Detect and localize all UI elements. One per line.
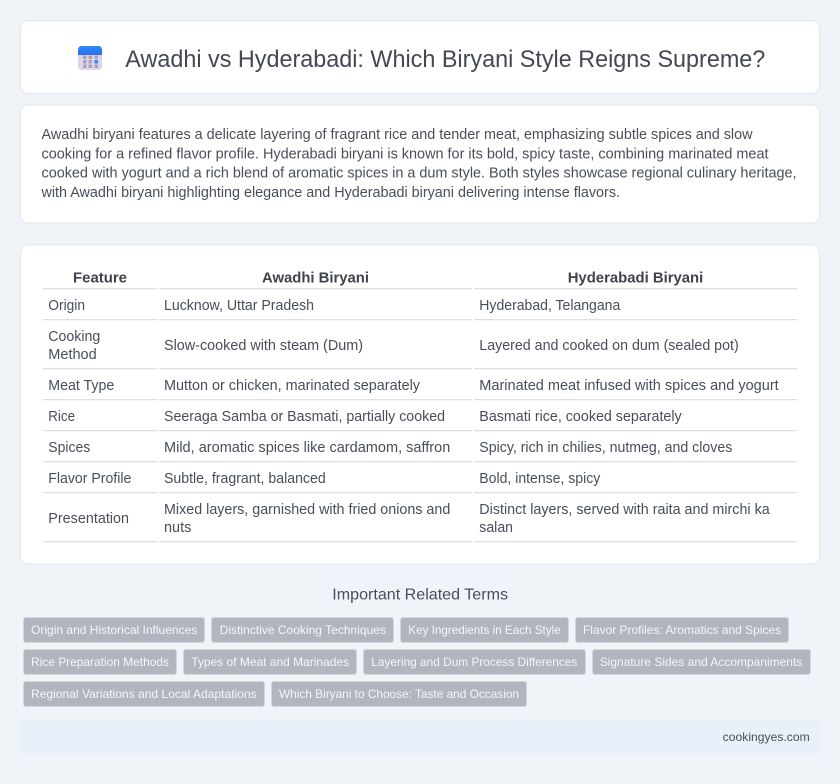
table row: meat type [43, 378, 797, 400]
table row: rice [43, 409, 797, 431]
tag: flavor profiles: Flavor Profiles: Aromatics and Spices [583, 623, 781, 637]
text block: description paragraph: cooked with yogurt and a rich blend of aromatic spices in a dum style. Both styles showcase regional culinary heritage, [42, 166, 797, 182]
table row: cooking method: Method [48, 347, 97, 363]
table row: rice: Basmati rice, cooked separately [479, 409, 682, 425]
tag: rice preparation methods [24, 650, 176, 674]
table row: cooking method [43, 329, 797, 369]
table row: cooking method: Layered and cooked on dum (sealed pot) [479, 338, 739, 354]
tag: origin and historical influences: Origin and Historical Influences [31, 623, 197, 637]
tag: distinctive cooking techniques: Distinctive Cooking Techniques [220, 623, 386, 637]
tag: layering and dum process differences: Layering and Dum Process Differences [371, 655, 577, 669]
table header row: Hyderabadi Biryani [568, 269, 703, 286]
text block: description paragraph [41, 127, 797, 201]
heading: important related terms: Important Related Terms [332, 586, 508, 603]
table row: meat type: Marinated meat infused with spices and yogurt [479, 378, 779, 394]
tag: key ingredients: Key Ingredients in Each Style [408, 623, 561, 637]
footer source text: cookingyes.com [723, 730, 810, 744]
table header row: Feature [73, 269, 127, 286]
tag: signature sides and accompaniments: Signature Sides and Accompaniments [600, 655, 802, 669]
table row: rice: Rice [48, 409, 75, 425]
table row: flavor profile [43, 471, 797, 493]
tag: layering and dum process differences [364, 650, 586, 674]
table header row: Awadhi Biryani [262, 269, 369, 286]
table row: presentation: Presentation [48, 511, 129, 527]
footer bar [20, 720, 820, 754]
tag: key ingredients [400, 618, 568, 642]
icon: calendar [78, 46, 102, 70]
tag: types of meat and marinades [184, 650, 356, 674]
table row: origin: Lucknow, Uttar Pradesh [164, 298, 314, 314]
table row: spices: Spicy, rich in chilies, nutmeg, and cloves [479, 440, 732, 456]
table row: presentation: salan [479, 520, 513, 536]
panel: comparison table [20, 245, 820, 564]
table row: spices: Mild, aromatic spices like cardamom, saffron [164, 440, 450, 456]
table row: cooking method: Slow-cooked with steam (Dum) [164, 338, 363, 354]
table row: origin: Origin [48, 298, 85, 314]
title: Awadhi vs Hyderabadi: Which Biryani Style Reigns Supreme? [125, 46, 765, 73]
table row: presentation: Mixed layers, garnished with fried onions and [164, 502, 450, 518]
tag: regional variations [24, 682, 264, 706]
tag: signature sides and accompaniments [592, 650, 810, 674]
tag: which biryani to choose: Which Biryani to Choose: Taste and Occasion [279, 687, 519, 701]
tag: types of meat and marinades: Types of Meat and Marinades [191, 655, 349, 669]
table row: origin: Hyderabad, Telangana [479, 298, 620, 314]
tag: origin and historical influences [24, 618, 204, 642]
table row: presentation [43, 502, 797, 542]
related term tags [24, 618, 810, 706]
table row: flavor profile: Flavor Profile [48, 471, 131, 487]
text block: description paragraph: with Awadhi biryani highlighting elegance and Hyderabadi biryani delivering intense flavors. [41, 185, 620, 201]
text block: description paragraph: Awadhi biryani features a delicate layering of fragrant rice and tender meat, emphasizing subtle spices and slow [42, 127, 753, 143]
tag: rice preparation methods: Rice Preparation Methods [31, 655, 169, 669]
table row: meat type: Meat Type [48, 378, 114, 394]
table row: spices: Spices [48, 440, 90, 456]
tag: distinctive cooking techniques [212, 618, 394, 642]
table row: cooking method: Cooking [48, 329, 100, 345]
tag: regional variations: Regional Variations and Local Adaptations [31, 687, 257, 701]
panel: description [20, 105, 820, 223]
table row: rice: Seeraga Samba or Basmati, partially cooked [164, 409, 445, 425]
tag: flavor profiles [576, 618, 788, 642]
table row: origin [43, 298, 797, 320]
table row: spices [43, 440, 797, 462]
table header row [43, 269, 797, 289]
text block: description paragraph: cooking for a refined flavor profile. Hyderabadi biryani is known for its bold, spicy taste, combining marinated meat [42, 146, 768, 162]
table row: flavor profile: Subtle, fragrant, balanced [164, 471, 326, 487]
tag: which biryani to choose [272, 682, 526, 706]
table row: flavor profile: Bold, intense, spicy [479, 471, 601, 487]
panel: title header [20, 20, 820, 94]
table row: presentation: nuts [164, 520, 191, 536]
table row: meat type: Mutton or chicken, marinated separately [164, 378, 421, 394]
table row: presentation: Distinct layers, served with raita and mirchi ka [479, 502, 770, 518]
